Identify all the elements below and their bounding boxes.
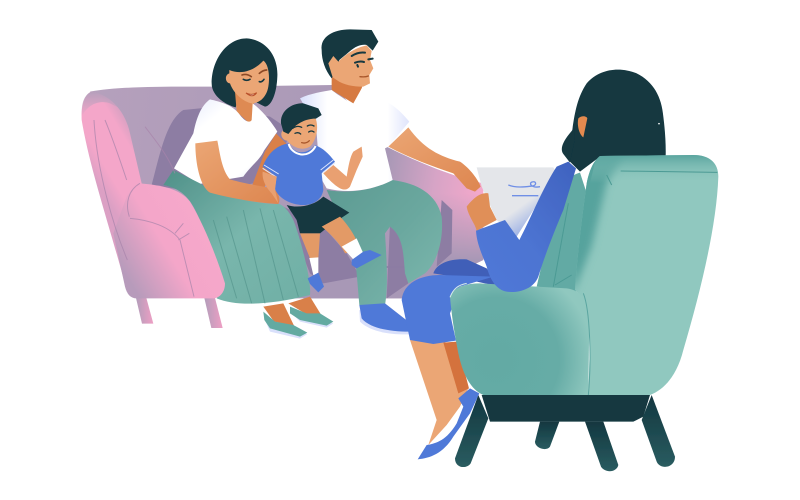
- skirt pleats: [213, 208, 298, 303]
- therapist's hair: [562, 70, 666, 172]
- child's near arm: [263, 172, 278, 203]
- scribbled notes: [508, 182, 540, 196]
- sofa arm top shading: [82, 91, 123, 117]
- family on sofa: [82, 29, 483, 339]
- man's neck: [332, 77, 363, 103]
- sofa arm back panel: [82, 91, 142, 290]
- man's hair: [322, 29, 378, 78]
- woman's features: [242, 70, 267, 96]
- woman's hair: [212, 38, 277, 107]
- child's features: [293, 125, 314, 143]
- child's shorts: [287, 197, 349, 233]
- child's collar: [289, 144, 316, 155]
- child's left leg: [300, 233, 320, 258]
- therapist's hand: [467, 193, 497, 231]
- chair side panel: [537, 173, 590, 292]
- chair legs: [455, 395, 675, 471]
- woman's skirt: [163, 170, 310, 304]
- chair base: [482, 395, 650, 422]
- chair arm: [450, 283, 589, 395]
- man's features: [352, 52, 373, 77]
- therapist's paper: [477, 167, 557, 237]
- woman's near arm: [195, 141, 279, 204]
- woman's neck: [235, 92, 254, 124]
- child's left shoe: [308, 273, 324, 292]
- therapist's shoe: [418, 388, 479, 459]
- man's trousers: [327, 180, 442, 305]
- man's shirt: [300, 88, 409, 191]
- child's raised arm: [323, 147, 363, 190]
- sofa shadow behind woman: [152, 107, 290, 193]
- man's shoe: [359, 303, 410, 334]
- therapist's ear: [578, 116, 587, 137]
- chair seams: [553, 171, 717, 287]
- hair highlight: [658, 123, 660, 124]
- sofa left arm: [82, 91, 225, 298]
- therapist's legs: [410, 340, 469, 445]
- woman's feet: [263, 297, 333, 339]
- child's shirt: [263, 143, 335, 205]
- woman: [163, 38, 333, 339]
- woman's shirt: [174, 99, 277, 184]
- child's right leg: [322, 217, 360, 253]
- therapist and armchair: [402, 70, 720, 471]
- child's face: [281, 117, 317, 149]
- sofa back: [90, 85, 483, 298]
- therapist's skirt: [402, 275, 493, 344]
- man's face: [328, 45, 373, 87]
- child: [263, 103, 382, 292]
- child's hair: [281, 103, 322, 134]
- chair back: [575, 155, 718, 395]
- therapist's lap dark: [433, 259, 500, 287]
- man's arm: [388, 127, 481, 192]
- woman's far arm: [252, 133, 287, 190]
- sofa: [90, 85, 483, 328]
- man: [300, 29, 481, 334]
- illustration: family counselling session: [82, 29, 718, 472]
- sofa arm front cushion: [113, 183, 225, 298]
- chair back shading: [567, 150, 720, 293]
- therapist's sleeve: [476, 162, 576, 292]
- shirt stripes: [263, 160, 335, 177]
- sofa legs: [136, 297, 223, 328]
- woman's face: [226, 61, 269, 103]
- child's right shoe: [352, 250, 382, 268]
